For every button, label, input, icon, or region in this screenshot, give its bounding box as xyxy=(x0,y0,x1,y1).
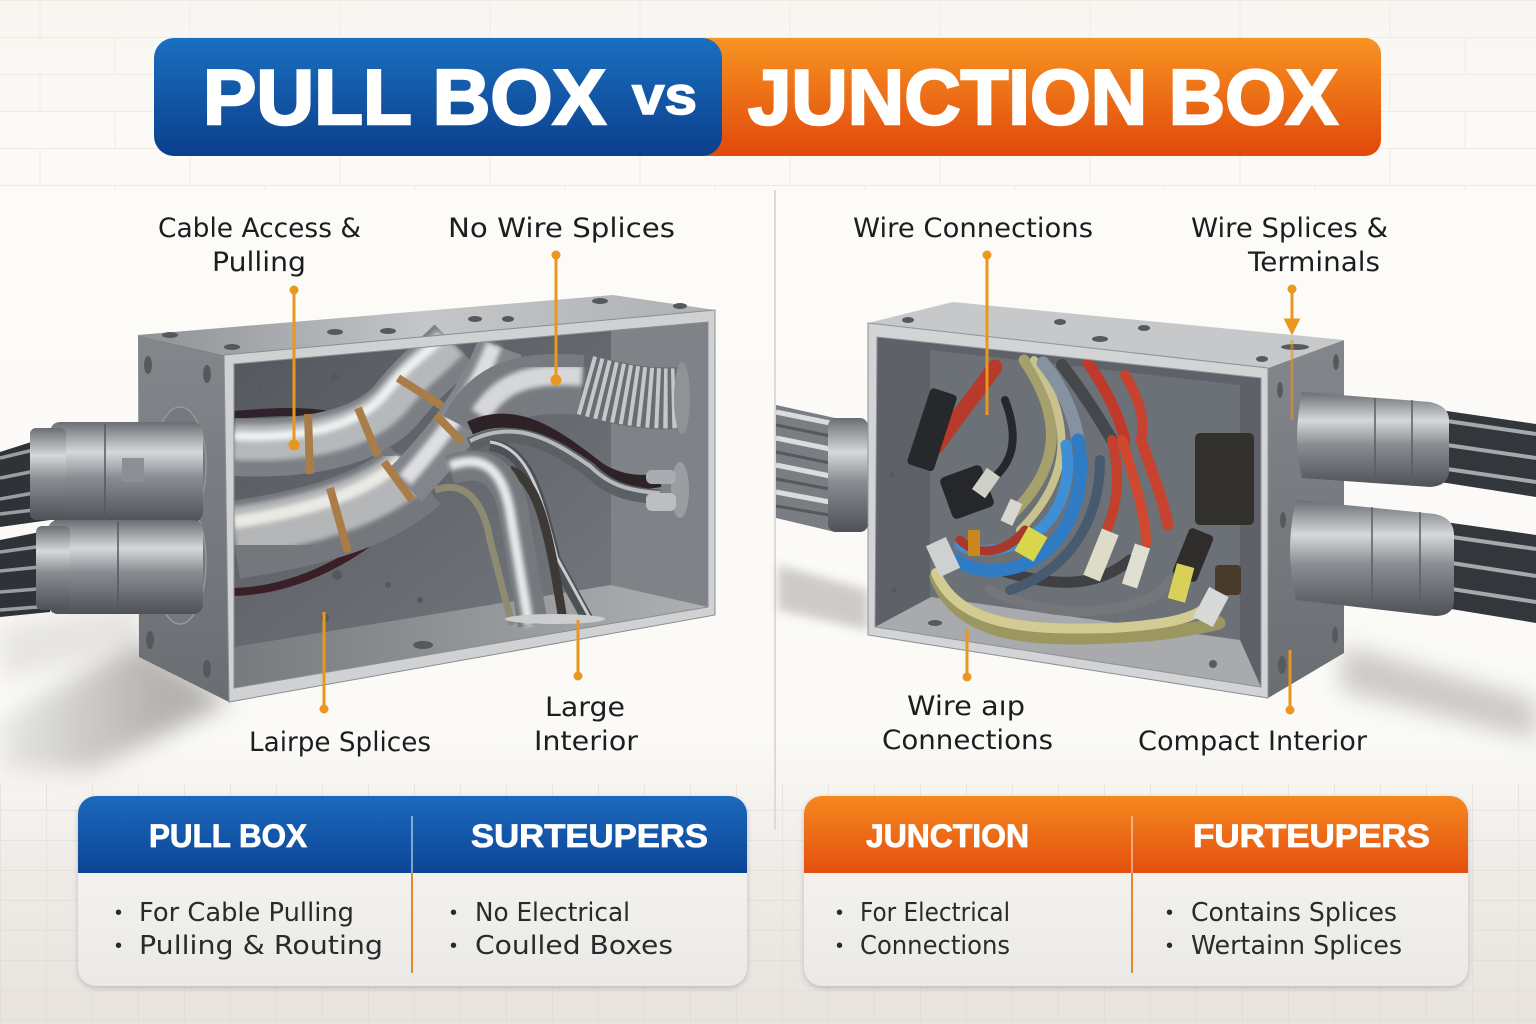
list: pull box features: Coulled Boxes xyxy=(475,931,673,961)
leader: wire splices xyxy=(1286,286,1298,420)
wires behind pipes xyxy=(234,412,395,592)
list: pull box purpose: Pulling & Routing xyxy=(139,931,383,961)
list: junction purpose: • xyxy=(836,935,843,957)
label: wire and connections: Wire aıp xyxy=(907,691,1025,722)
list: pull box features: No Electrical xyxy=(475,898,630,928)
upper steel pipe xyxy=(234,338,455,447)
list: junction purpose: • xyxy=(836,902,843,924)
copper clamp bands xyxy=(308,378,462,552)
leader: cable access xyxy=(290,287,298,449)
list: pull box features: • xyxy=(450,935,457,957)
right pipe with corrugated section xyxy=(470,362,690,434)
right conduit fittings xyxy=(1290,392,1454,616)
list: pull box purpose: • xyxy=(115,935,122,957)
list: pull box features: • xyxy=(450,902,457,924)
pull box illustration xyxy=(0,295,715,702)
label: large interior: Interior xyxy=(534,726,639,757)
list: pull box features xyxy=(450,898,673,961)
box side face xyxy=(138,335,229,702)
label: wire and connections: Connections xyxy=(882,725,1053,756)
label: cable access and pulling: Cable Access & xyxy=(158,213,361,244)
fasteners on top face xyxy=(144,298,687,678)
floor shadows xyxy=(0,565,1536,770)
side face flanges xyxy=(154,407,206,624)
box top face xyxy=(868,302,1344,368)
list: pull box purpose xyxy=(115,898,383,961)
label: wire and connections xyxy=(882,691,1053,756)
fasteners xyxy=(889,317,1339,674)
heading: pull box: PULL BOX xyxy=(149,818,308,854)
label: large interior xyxy=(534,692,639,757)
panel: pull box card xyxy=(78,796,747,986)
title: vs: vs xyxy=(632,66,697,126)
left conduit fittings xyxy=(30,422,203,614)
banner orange half xyxy=(600,38,1381,156)
leader: large splices xyxy=(321,612,327,712)
list: junction features: • xyxy=(1166,902,1173,924)
list: junction features: Wertainn Splices xyxy=(1191,931,1402,961)
list: junction purpose xyxy=(836,898,1010,961)
label: large splices: Lairpe Splices xyxy=(249,727,431,758)
right external cables xyxy=(1440,410,1536,623)
heading: features: SURTEUPERS xyxy=(471,818,708,854)
wires xyxy=(936,360,1219,638)
list: junction features: Contains Splices xyxy=(1191,898,1397,928)
external cable bundles left xyxy=(0,436,50,617)
box floor xyxy=(875,597,1261,687)
heading: junction: JUNCTION xyxy=(866,818,1029,854)
box front frame xyxy=(868,323,1268,698)
title banner xyxy=(154,38,1381,156)
label: cable access and pulling: Pulling xyxy=(212,247,306,278)
list: junction features: • xyxy=(1166,935,1173,957)
leader: wire connections lower xyxy=(964,630,970,680)
panel: junction box card xyxy=(804,796,1468,986)
box inner back xyxy=(875,337,1261,687)
label: wire splices and terminals xyxy=(1191,213,1388,278)
title: pull box: PULL BOX xyxy=(203,53,606,141)
leader: wire connections xyxy=(984,252,990,415)
box top face xyxy=(138,295,715,355)
label: wire splices and terminals: Wire Splices & xyxy=(1191,213,1388,244)
label: large interior: Large xyxy=(545,692,625,723)
list: pull box purpose: • xyxy=(115,902,122,924)
label: compact interior: Compact Interior xyxy=(1138,726,1368,757)
box floor xyxy=(234,585,708,688)
box back wall xyxy=(234,322,708,688)
small conduits and wires xyxy=(435,421,660,625)
left external cables xyxy=(776,405,868,532)
box front frame xyxy=(224,310,715,702)
box right side face xyxy=(1268,340,1344,698)
label: wire connections: Wire Connections xyxy=(853,213,1093,244)
list: pull box purpose: For Cable Pulling xyxy=(139,898,354,928)
junction box illustration xyxy=(776,302,1536,698)
leader: no wire splices xyxy=(552,252,560,384)
list: junction purpose: Connections xyxy=(860,931,1010,961)
leader: compact interior xyxy=(1287,650,1293,713)
label: cable access and pulling xyxy=(158,213,361,278)
wire terminals and connectors xyxy=(906,387,1254,627)
right flange fittings xyxy=(646,462,689,518)
label: wire splices and terminals: Terminals xyxy=(1247,247,1380,278)
heading: features: FURTEUPERS xyxy=(1193,818,1430,854)
leader: large interior xyxy=(575,620,581,679)
list: junction features xyxy=(1166,898,1402,961)
lower steel pipe xyxy=(234,345,500,540)
label: no wire splices: No Wire Splices xyxy=(448,213,675,244)
title: junction box: JUNCTION BOX xyxy=(748,53,1338,141)
banner blue half xyxy=(154,38,722,156)
list: junction purpose: For Electrical xyxy=(860,898,1010,928)
leader lines xyxy=(290,252,1298,713)
